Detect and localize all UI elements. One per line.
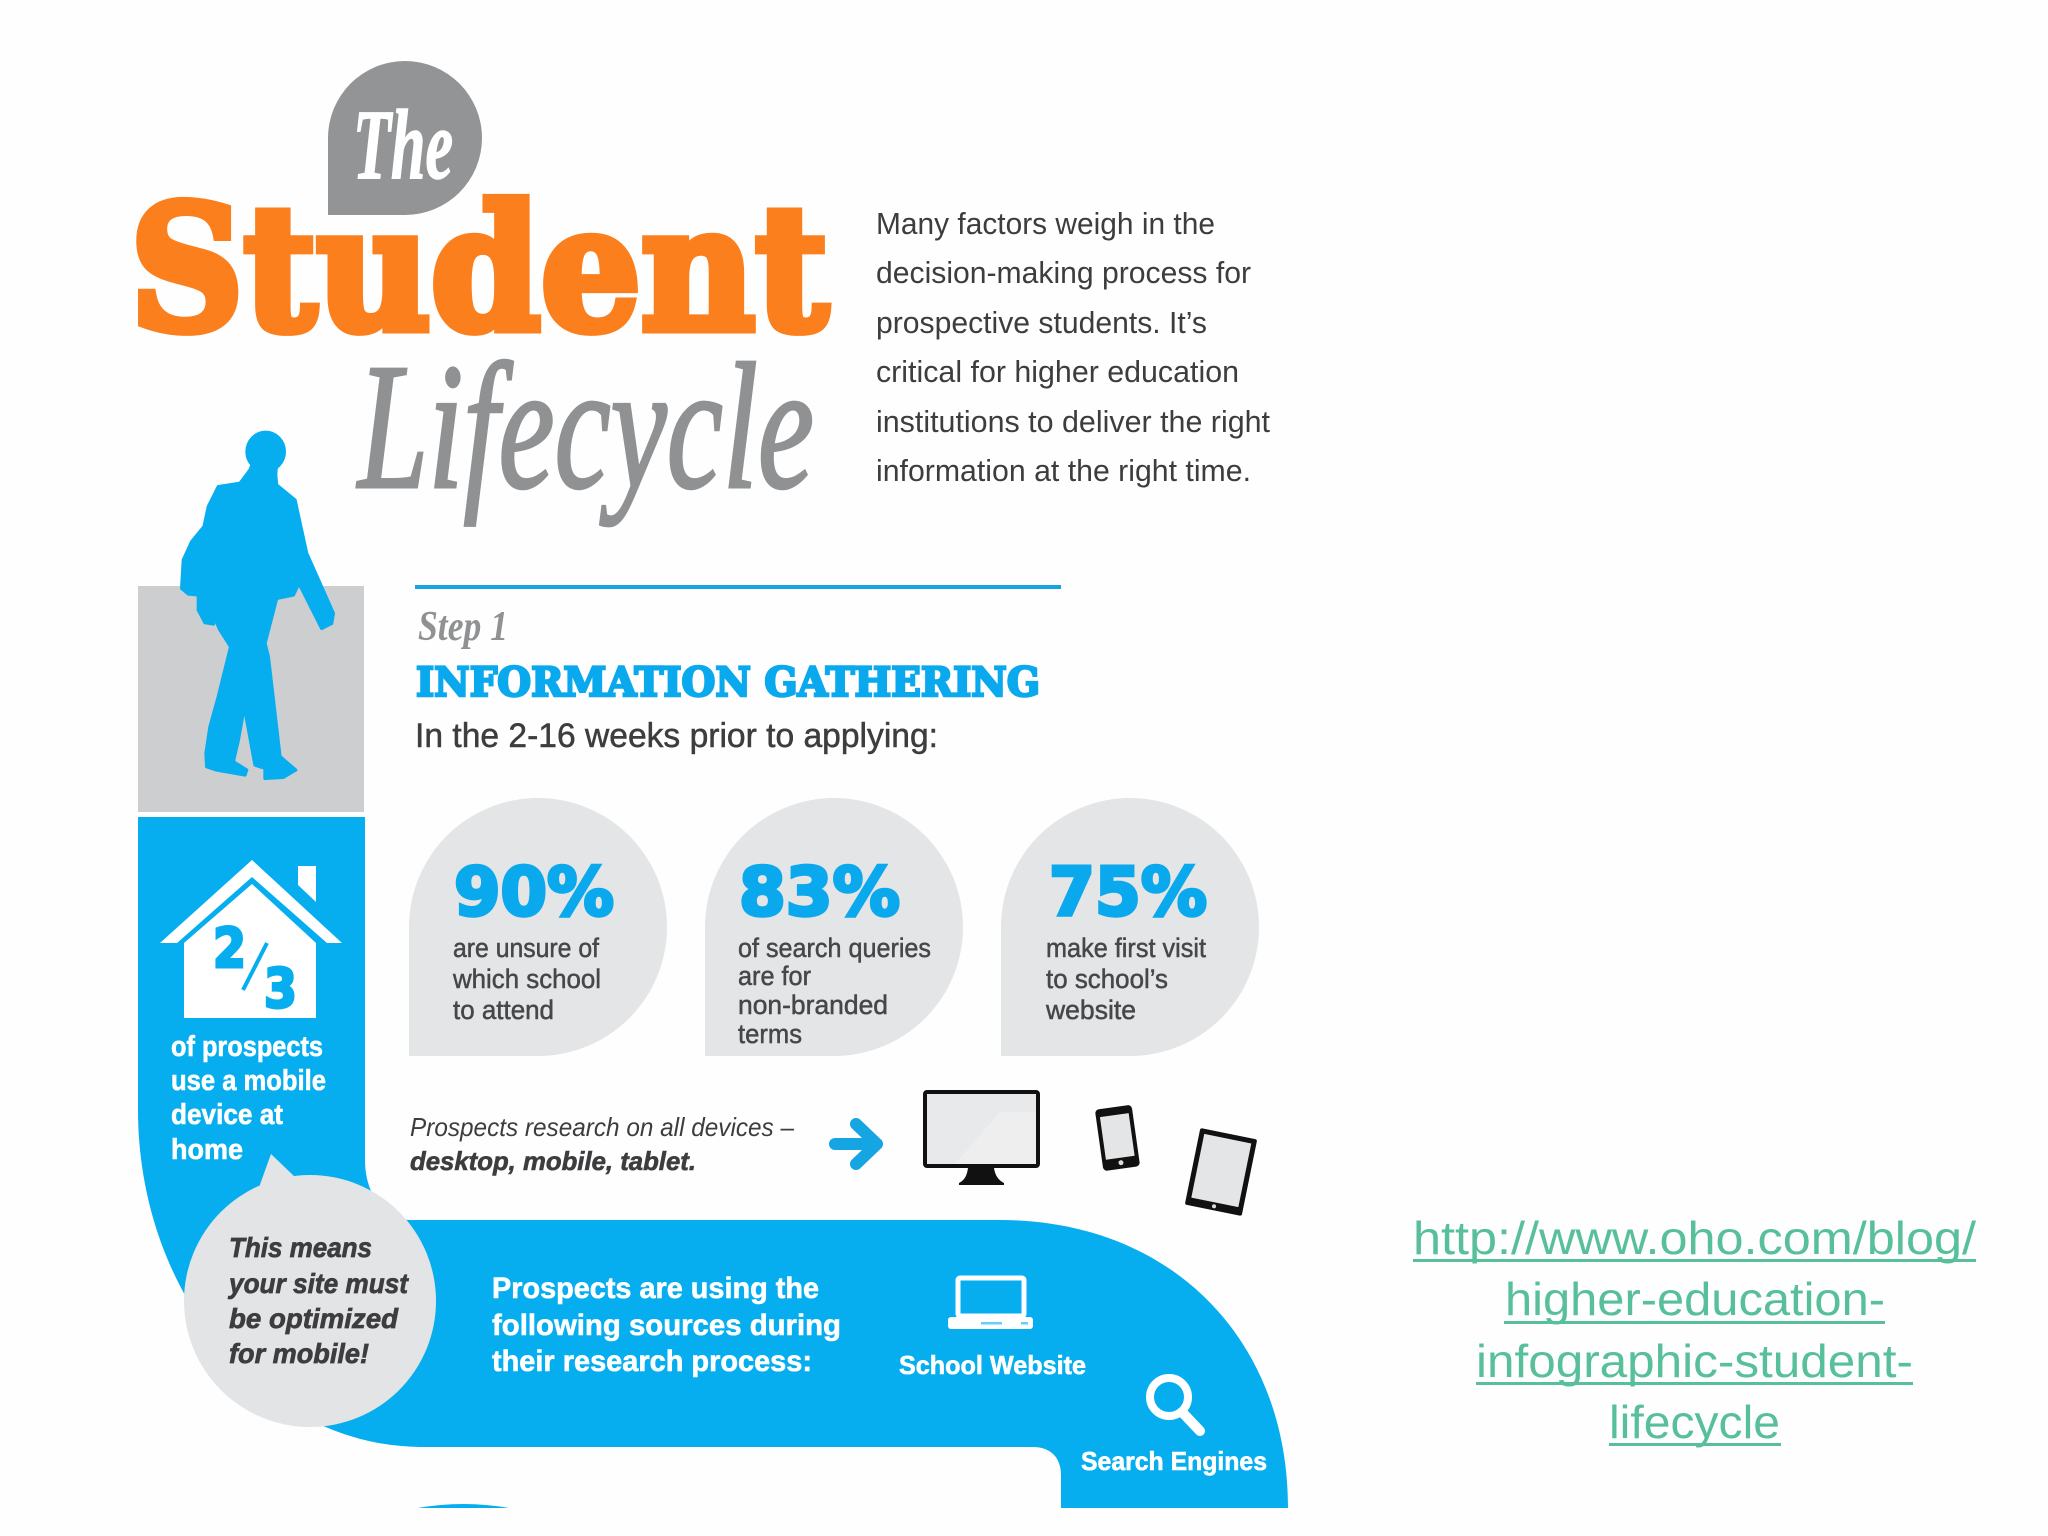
title bubble: The xyxy=(328,61,482,215)
stat: 90%: to attend xyxy=(453,995,554,1025)
callout: optimized for mobile xyxy=(184,1154,436,1427)
stat: 90%: are unsure of xyxy=(453,933,599,963)
mobile statistic text: home xyxy=(171,1134,243,1166)
intro paragraph xyxy=(876,206,1270,488)
source: school website xyxy=(899,1278,1086,1380)
source link: higher-education- xyxy=(1505,1273,1885,1325)
arrow to devices xyxy=(835,1124,877,1164)
icon: walking student silhouette xyxy=(182,432,333,778)
icon: tablet xyxy=(1185,1128,1257,1216)
gray floor panel xyxy=(138,586,364,812)
intro paragraph: decision-making process for xyxy=(876,255,1251,290)
sources intro text: Prospects are using the xyxy=(492,1272,819,1305)
stat: 83%: of search queries xyxy=(738,933,931,963)
devices text: desktop, mobile, tablet. xyxy=(410,1146,696,1176)
intro paragraph: prospective students. It’s xyxy=(876,305,1207,340)
step label: Step 1 xyxy=(418,604,508,650)
mobile statistic text: use a mobile xyxy=(171,1065,326,1097)
callout: optimized for mobile: for mobile! xyxy=(229,1338,369,1369)
stat: 75%: to school’s xyxy=(1046,964,1168,994)
heading rule xyxy=(415,585,1061,589)
devices text: Prospects research on all devices – xyxy=(410,1112,794,1142)
stat: 83%: are for xyxy=(738,961,811,991)
icon: house with two thirds: 2 xyxy=(213,917,246,980)
callout: optimized for mobile: This means xyxy=(229,1232,372,1263)
sources intro text: their research process: xyxy=(492,1345,812,1378)
stat: 75%: website xyxy=(1045,995,1136,1025)
callout: optimized for mobile: be optimized xyxy=(229,1303,399,1334)
stat: 75%: make first visit xyxy=(1046,933,1206,963)
stat: 75% xyxy=(1001,798,1259,1056)
title word: Lifecycle: Lifecycle xyxy=(356,327,814,526)
source link: lifecycle xyxy=(1609,1396,1780,1448)
source link xyxy=(1413,1212,1976,1448)
stat: 90% xyxy=(409,798,667,1056)
step 1 heading block xyxy=(415,585,1061,755)
intro paragraph: critical for higher education xyxy=(876,354,1239,389)
stat: 75%: 75% xyxy=(1049,853,1207,931)
stat: 83%: non-branded xyxy=(738,990,888,1020)
section title: INFORMATION GATHERING xyxy=(416,659,1040,706)
source link: http://www.oho.com/blog/ xyxy=(1413,1212,1976,1264)
callout: optimized for mobile: your site must xyxy=(227,1268,410,1299)
icon: desktop monitor xyxy=(925,1092,1038,1185)
icon: phone xyxy=(1095,1105,1140,1171)
icon: house with two thirds xyxy=(160,860,342,1020)
stat: 90%: 90% xyxy=(454,853,614,931)
stat: 83% xyxy=(705,798,963,1056)
mobile statistic text xyxy=(171,1031,326,1166)
icon: house with two thirds: 3 xyxy=(264,957,297,1020)
title: The Student Lifecycle xyxy=(130,61,828,526)
stat: 90%: which school xyxy=(452,964,601,994)
intro paragraph: institutions to deliver the right xyxy=(876,404,1270,439)
intro paragraph: Many factors weigh in the xyxy=(876,206,1215,241)
stat: 83%: terms xyxy=(738,1019,802,1049)
intro paragraph: information at the right time. xyxy=(876,453,1251,488)
sources intro text xyxy=(492,1272,841,1378)
mobile statistic text: device at xyxy=(171,1099,283,1131)
source: school website: School Website xyxy=(899,1350,1086,1380)
sources intro text: following sources during xyxy=(492,1309,841,1342)
subheading: In the 2-16 weeks prior to applying: xyxy=(415,717,938,755)
source: search engines xyxy=(1081,1378,1267,1476)
title word: Student: Student xyxy=(130,167,828,370)
source: search engines: Search Engines xyxy=(1081,1446,1267,1476)
mobile statistic text: of prospects xyxy=(171,1031,323,1063)
title bubble: The: The xyxy=(353,89,453,200)
stat: 83%: 83% xyxy=(739,853,900,931)
source link: infographic-student- xyxy=(1476,1335,1913,1387)
devices text xyxy=(410,1112,794,1176)
blue winding path band xyxy=(138,817,1288,1508)
next band start at the bottom edge xyxy=(418,1504,509,1508)
